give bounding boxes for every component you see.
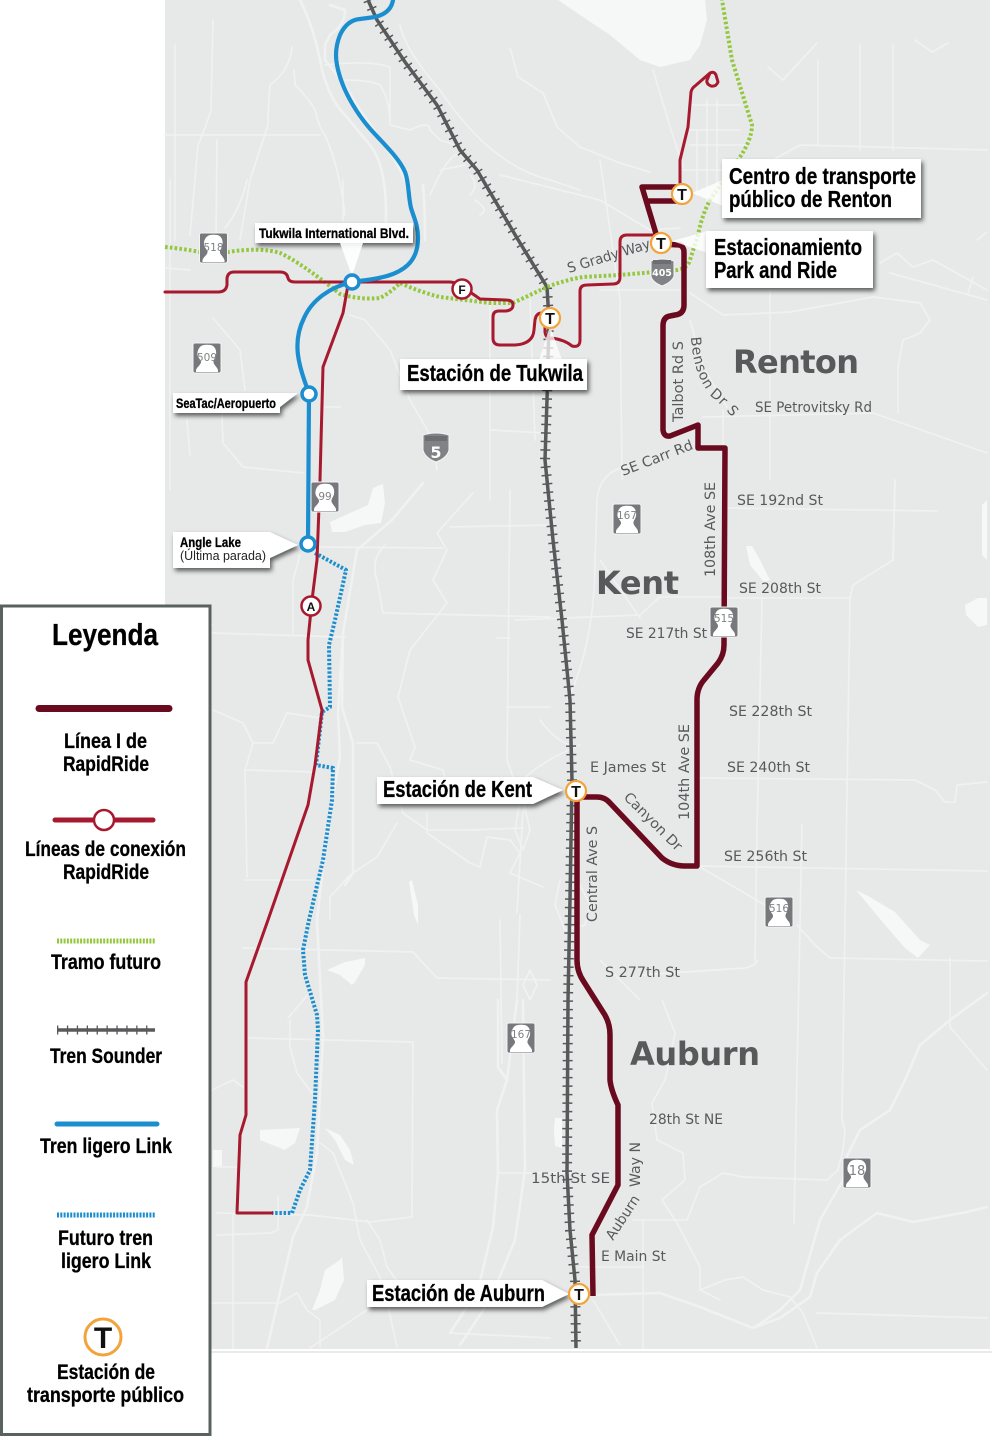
street labels: SE 217th St bbox=[626, 626, 708, 642]
street labels: SE Petrovitsky Rd bbox=[755, 400, 872, 416]
transit station: Angle Lake bbox=[301, 537, 315, 551]
street labels bbox=[531, 236, 872, 1265]
street labels: SE 192nd St bbox=[737, 493, 824, 509]
legend text: Estación de transporte público: Estación de bbox=[57, 1361, 155, 1384]
legend text: Líneas de conexión RapidRide bbox=[25, 838, 186, 884]
legend sample: transit station bbox=[85, 1319, 121, 1355]
interstate shield: 5: 5 bbox=[430, 443, 442, 462]
street labels: 108th Ave SE bbox=[703, 482, 719, 577]
callout: Angle Lake bbox=[173, 532, 298, 568]
panel: legend bbox=[2, 606, 210, 1434]
legend text: Futuro tren ligero Link bbox=[58, 1227, 153, 1273]
line: Sounder train bbox=[368, 0, 576, 1348]
callout: Centro de transporte público de Renton bbox=[692, 159, 921, 218]
state route shields bbox=[193, 233, 871, 1188]
route marker: F bbox=[452, 280, 472, 298]
street labels: SE 228th St bbox=[729, 704, 813, 720]
shield: 516 bbox=[765, 897, 793, 927]
transit station: Tukwila International Blvd bbox=[345, 275, 359, 289]
callout: Tukwila International Blvd: Tukwila International Blvd. bbox=[259, 226, 409, 241]
legend sample: transit station: T bbox=[94, 1322, 112, 1355]
water bodies bbox=[213, 0, 987, 1310]
callout: Angle Lake: (Última parada) bbox=[180, 548, 266, 563]
T station: Auburn: T bbox=[574, 1287, 584, 1304]
street labels: Benson Dr S bbox=[691, 338, 738, 416]
street labels: SE 208th St bbox=[739, 581, 822, 597]
shield: 518 bbox=[200, 233, 228, 263]
T station: Renton bbox=[672, 184, 692, 204]
shield: 99 bbox=[311, 482, 339, 512]
street labels: 104th Ave SE bbox=[677, 724, 693, 820]
legend text: Tren ligero Link: Tren ligero Link bbox=[40, 1135, 172, 1158]
shield: 167 south: 167 bbox=[511, 1029, 531, 1041]
T station: Tukwila: T bbox=[545, 311, 555, 328]
street labels: E Main St bbox=[601, 1249, 667, 1265]
shield: 167 north bbox=[613, 504, 641, 534]
shield: 167 north: 167 bbox=[617, 510, 637, 522]
shield: 518: 518 bbox=[203, 242, 224, 254]
legend text: Futuro tren ligero Link: ligero Link bbox=[61, 1250, 151, 1273]
route marker: F: F bbox=[458, 283, 466, 297]
line: future Link light rail bbox=[272, 553, 346, 1213]
street labels: SE Carr Rd bbox=[619, 438, 695, 480]
interstate shield: 405 bbox=[651, 259, 674, 286]
shield: 18: 18 bbox=[849, 1164, 865, 1179]
map background bbox=[165, 0, 990, 1349]
legend text: Tren Sounder: Tren Sounder bbox=[50, 1045, 162, 1068]
legend heading: Leyenda bbox=[52, 617, 159, 652]
T station: Renton: T bbox=[677, 187, 687, 204]
city label: Renton: Renton bbox=[733, 343, 859, 381]
T station: Park and Ride bbox=[651, 233, 671, 253]
street labels: SE 256th St bbox=[724, 849, 808, 865]
street labels: Canyon Dr bbox=[620, 790, 685, 855]
street labels: SE 240th St bbox=[727, 760, 811, 776]
T station: Auburn bbox=[569, 1284, 589, 1304]
legend text: Línea I de RapidRide: RapidRide bbox=[63, 753, 149, 776]
route marker: A bbox=[302, 596, 320, 616]
callout: Tukwila International Blvd bbox=[255, 223, 413, 276]
shield: 515: 515 bbox=[714, 613, 734, 625]
line: RapidRide connection A bbox=[237, 285, 348, 1213]
legend sample: Sounder train bbox=[57, 1028, 155, 1032]
shield: 509: 509 bbox=[197, 352, 217, 364]
legend text: Líneas de conexión RapidRide: RapidRide bbox=[63, 861, 149, 884]
legend text: Líneas de conexión RapidRide: Líneas de conexión bbox=[25, 838, 186, 861]
callout: Estación de Kent: Estación de Kent bbox=[383, 776, 532, 802]
line: Link light rail bbox=[297, 0, 418, 544]
road network bbox=[165, 0, 987, 1348]
interstate shield: 405: 405 bbox=[652, 268, 672, 279]
callout: Estacionamiento Park and Ride: Estacionamiento bbox=[714, 234, 862, 260]
T station: Kent bbox=[566, 781, 586, 801]
street labels: Central Ave S bbox=[585, 826, 601, 922]
city label: Auburn: Auburn bbox=[630, 1035, 760, 1073]
line: RapidRide connection F bbox=[165, 235, 660, 346]
street labels: S 277th St bbox=[605, 965, 681, 981]
street labels: Way N bbox=[628, 1142, 644, 1187]
street labels: 15th St SE bbox=[531, 1171, 610, 1187]
street labels: 28th St NE bbox=[649, 1112, 723, 1128]
street labels: Talbot Rd S bbox=[671, 341, 687, 423]
callout: Estacionamiento Park and Ride bbox=[672, 231, 873, 288]
street labels: Auburn bbox=[603, 1193, 644, 1243]
legend text: Estación de transporte público: transporte público bbox=[27, 1384, 184, 1407]
legend sample: future segment bbox=[57, 938, 155, 944]
shield: 509 bbox=[193, 343, 221, 373]
transit station: SeaTac bbox=[302, 387, 316, 401]
callout: Estación de Tukwila: Estación de Tukwila bbox=[407, 360, 583, 386]
shield: 516: 516 bbox=[769, 903, 789, 915]
street labels: E James St bbox=[590, 760, 667, 776]
interstate shield: 5 bbox=[423, 433, 449, 462]
callout: Estacionamiento Park and Ride: Park and Ride bbox=[714, 257, 837, 283]
legend text: Línea I de RapidRide bbox=[63, 730, 149, 776]
route marker: A: A bbox=[307, 600, 316, 614]
T station: Park and Ride: T bbox=[656, 236, 666, 253]
city label: Kent: Kent bbox=[596, 564, 679, 602]
street labels: S Grady Way bbox=[565, 236, 652, 277]
legend sample: connection line bbox=[55, 810, 153, 830]
line: RapidRide connection Renton bbox=[680, 72, 718, 183]
shield: 18 bbox=[843, 1158, 871, 1188]
callout: SeaTac/Aeropuerto: SeaTac/Aeropuerto bbox=[176, 396, 276, 411]
legend sample: Link light rail bbox=[57, 1122, 157, 1126]
legend text: Línea I de RapidRide: Línea I de bbox=[64, 730, 147, 753]
line: RapidRide I bbox=[577, 187, 725, 1296]
shield: 167 south bbox=[507, 1023, 535, 1053]
T station: Kent: T bbox=[571, 784, 581, 801]
callout: Angle Lake: Angle Lake bbox=[180, 535, 241, 550]
shield: 515 bbox=[710, 607, 738, 637]
legend text: Tramo futuro: Tramo futuro bbox=[51, 951, 161, 974]
callout: Estación de Auburn: Estación de Auburn bbox=[372, 1280, 545, 1306]
callout: Centro de transporte público de Renton: público de Renton bbox=[729, 186, 892, 212]
T station: Tukwila bbox=[540, 308, 560, 328]
line: future extension (green) bbox=[165, 0, 752, 303]
shield: 99: 99 bbox=[318, 491, 332, 503]
legend sample: RapidRide I line bbox=[39, 705, 169, 712]
callout: Estación de Tukwila bbox=[400, 326, 587, 390]
legend sample: future Link bbox=[57, 1212, 156, 1218]
legend text: Estación de transporte público bbox=[27, 1361, 184, 1407]
legend text: Futuro tren ligero Link: Futuro tren bbox=[58, 1227, 153, 1250]
callout: Centro de transporte público de Renton: Centro de transporte bbox=[729, 163, 916, 189]
